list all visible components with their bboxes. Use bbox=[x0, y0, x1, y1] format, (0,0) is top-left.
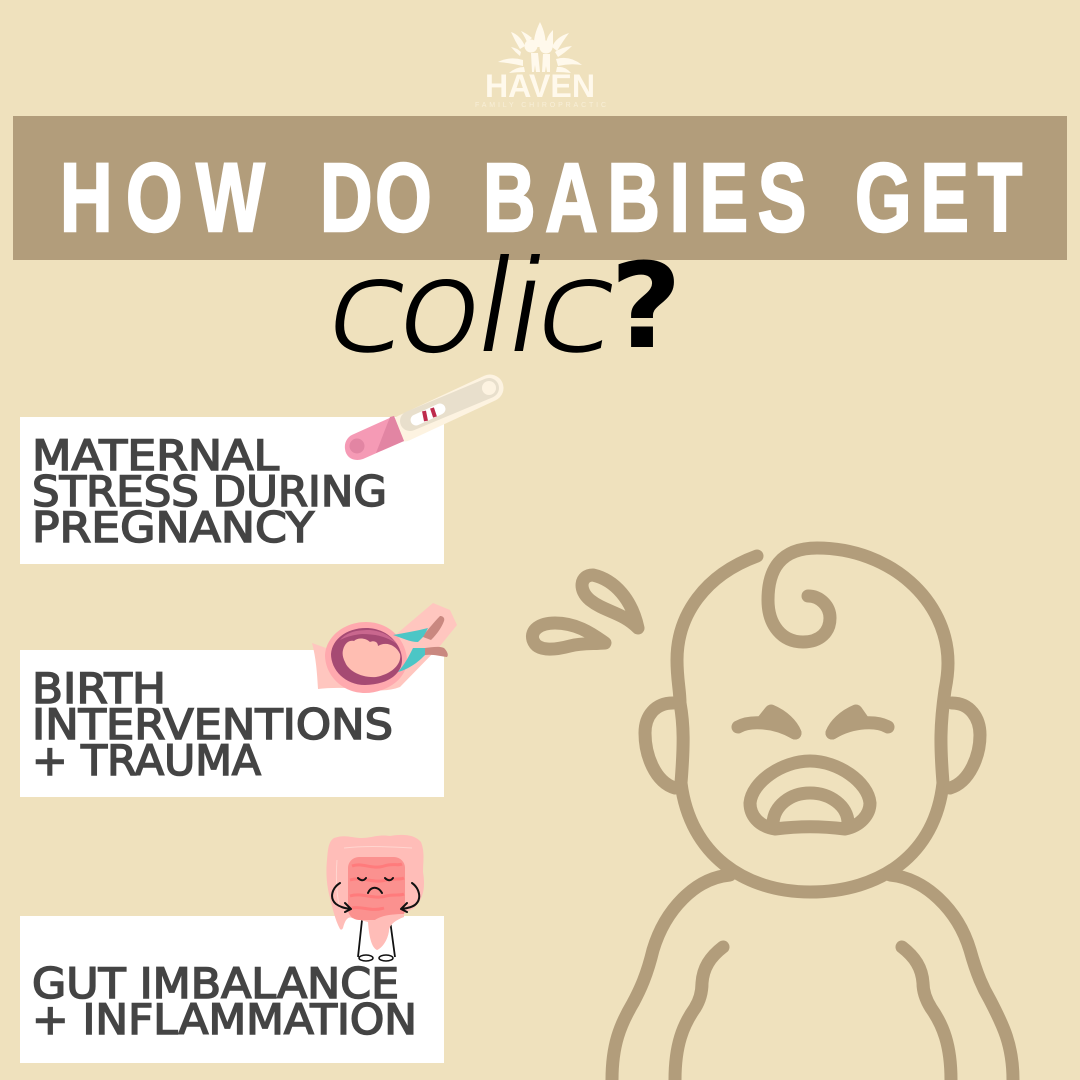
illustration: crying baby bbox=[532, 548, 1013, 1080]
panel: gut imbalance and inflammation bbox=[20, 916, 444, 1063]
panel: birth interventions and trauma: INTERVENTIONS bbox=[32, 700, 393, 749]
baby head outline with curl bbox=[677, 548, 948, 892]
panel: birth interventions and trauma bbox=[20, 650, 444, 797]
subtitle: colic?: ? bbox=[610, 237, 682, 375]
icon: pregnancy test bbox=[345, 381, 496, 460]
body bbox=[612, 875, 1013, 1080]
icon: sad intestine bbox=[326, 835, 424, 961]
title text: GET bbox=[855, 144, 1022, 252]
title text: HOW bbox=[60, 144, 265, 252]
panel: birth interventions and trauma: + TRAUMA bbox=[32, 736, 261, 785]
tear drops bbox=[582, 575, 638, 628]
panel: maternal stress during pregnancy: MATERNAL bbox=[32, 431, 280, 480]
mouth bbox=[750, 761, 870, 829]
logo children bbox=[524, 40, 552, 72]
title text: BABIES bbox=[483, 144, 806, 252]
logo: Haven Family Chiropractic: FAMILY CHIROPRACTIC bbox=[475, 102, 606, 109]
subtitle: colic?: colic bbox=[317, 234, 621, 380]
panel: maternal stress during pregnancy: STRESS DURING bbox=[32, 467, 387, 516]
logo: Haven Family Chiropractic: HAVEN bbox=[485, 68, 595, 104]
icon: baby in womb bbox=[312, 603, 457, 693]
title text bbox=[60, 144, 1022, 252]
panel: maternal stress during pregnancy bbox=[20, 417, 444, 564]
panel: gut imbalance and inflammation: + INFLAMMATION bbox=[32, 995, 417, 1044]
eyes bbox=[738, 711, 888, 733]
panel: birth interventions and trauma: BIRTH bbox=[32, 664, 166, 713]
logo: Haven Family Chiropractic bbox=[475, 22, 606, 109]
title text: DO bbox=[320, 144, 432, 252]
armpits bbox=[675, 947, 951, 1080]
ears bbox=[645, 703, 980, 788]
panel: gut imbalance and inflammation: GUT IMBALANCE bbox=[32, 959, 399, 1008]
panel: maternal stress during pregnancy: PREGNANCY bbox=[32, 503, 314, 552]
title banner bbox=[13, 116, 1067, 260]
